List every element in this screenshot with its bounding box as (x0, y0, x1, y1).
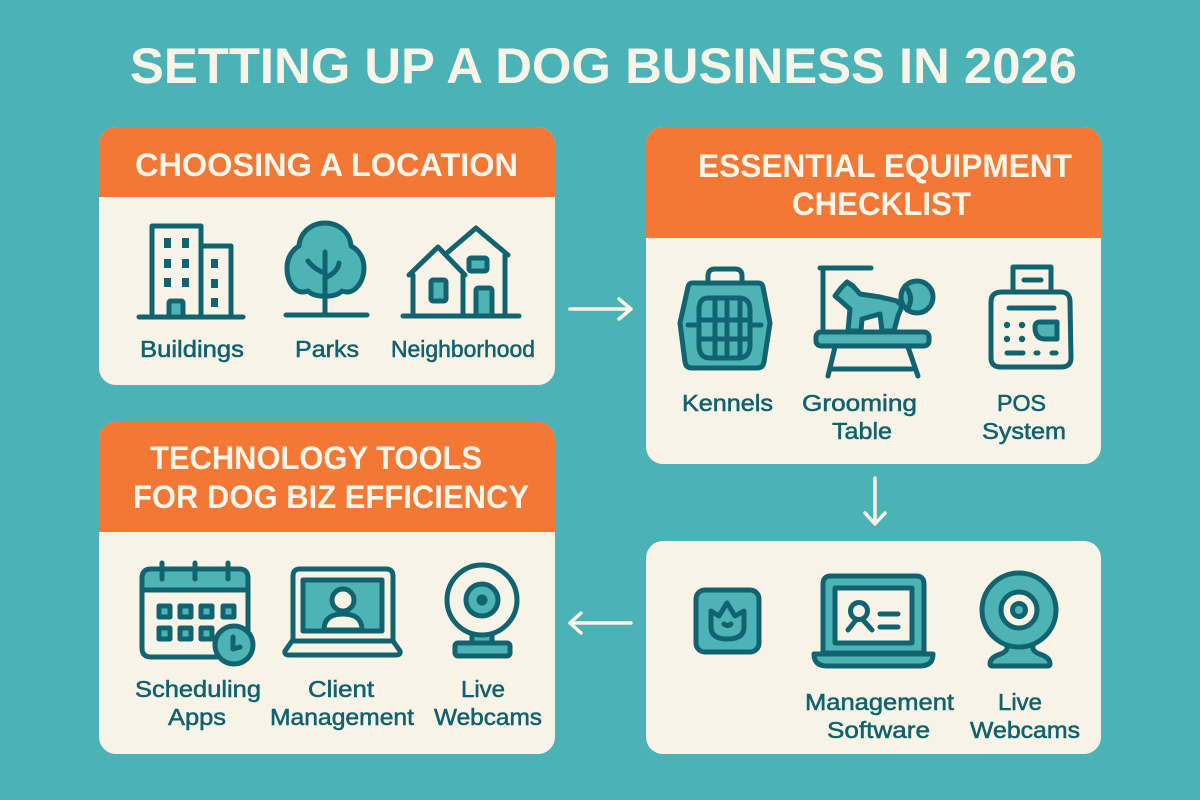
label: management software: Software (827, 717, 930, 743)
arrow: software to technology tools (570, 613, 631, 633)
label: live webcams: Webcams (970, 717, 1080, 743)
label: management software: Management (805, 689, 955, 715)
label: parks: Parks (295, 336, 359, 362)
header: technology tools: TECHNOLOGY TOOLS (150, 440, 482, 476)
header: essential equipment checklist (646, 127, 1101, 238)
header: technology tools: FOR DOG BIZ EFFICIENCY (133, 479, 529, 515)
header: technology tools (99, 422, 555, 532)
header: essential equipment checklist: ESSENTIAL EQUIPMENT (698, 148, 1072, 184)
label: scheduling apps: Scheduling (135, 676, 261, 702)
label: client management: Management (270, 704, 414, 730)
label: client management (270, 676, 414, 730)
panel: choosing a location (99, 127, 555, 385)
icon: live webcam (447, 565, 517, 656)
arrow: equipment to software (865, 478, 885, 524)
label: live webcams (434, 676, 542, 730)
label: live webcams: Webcams (434, 704, 542, 730)
title: SETTING UP A DOG BUSINESS IN 2026 (130, 38, 1077, 94)
icon: calendar with clock (142, 563, 253, 664)
label: client management: Client (308, 676, 375, 702)
label: neighborhood: Neighborhood (391, 336, 535, 362)
icon: client laptop (285, 569, 400, 655)
header: choosing a location (99, 127, 555, 197)
label: buildings: Buildings (140, 336, 244, 362)
icon: neighborhood houses (403, 228, 519, 316)
label: kennels: Kennels (682, 390, 773, 416)
label: POS system: POS (997, 390, 1046, 416)
icon: kennel (680, 269, 770, 368)
label: grooming table (802, 390, 917, 444)
label: POS system: System (982, 418, 1066, 444)
icon: buildings (139, 226, 243, 317)
label: grooming table: Table (832, 418, 892, 444)
label: POS system (982, 390, 1066, 444)
arrow: location to equipment (570, 299, 631, 319)
label: scheduling apps: Apps (168, 704, 226, 730)
label: live webcams: Live (461, 676, 505, 702)
label: grooming table: Grooming (802, 390, 917, 416)
panel: technology tools (99, 422, 555, 754)
panel: essential equipment checklist (646, 127, 1101, 464)
header: choosing a location: CHOOSING A LOCATION (135, 147, 518, 183)
icon: webcam (982, 573, 1056, 666)
icon: tree (286, 223, 367, 315)
label: scheduling apps (135, 676, 261, 730)
header: essential equipment checklist: CHECKLIST (792, 186, 971, 222)
label: live webcams: Live (998, 689, 1042, 715)
icon: POS system (991, 267, 1071, 367)
panel: software and webcams (646, 541, 1101, 754)
icon: management laptop (814, 576, 933, 666)
label: management software (805, 689, 955, 743)
icon: grooming table (816, 268, 933, 376)
label: live webcams (970, 689, 1080, 743)
icon: flame badge (696, 590, 759, 652)
